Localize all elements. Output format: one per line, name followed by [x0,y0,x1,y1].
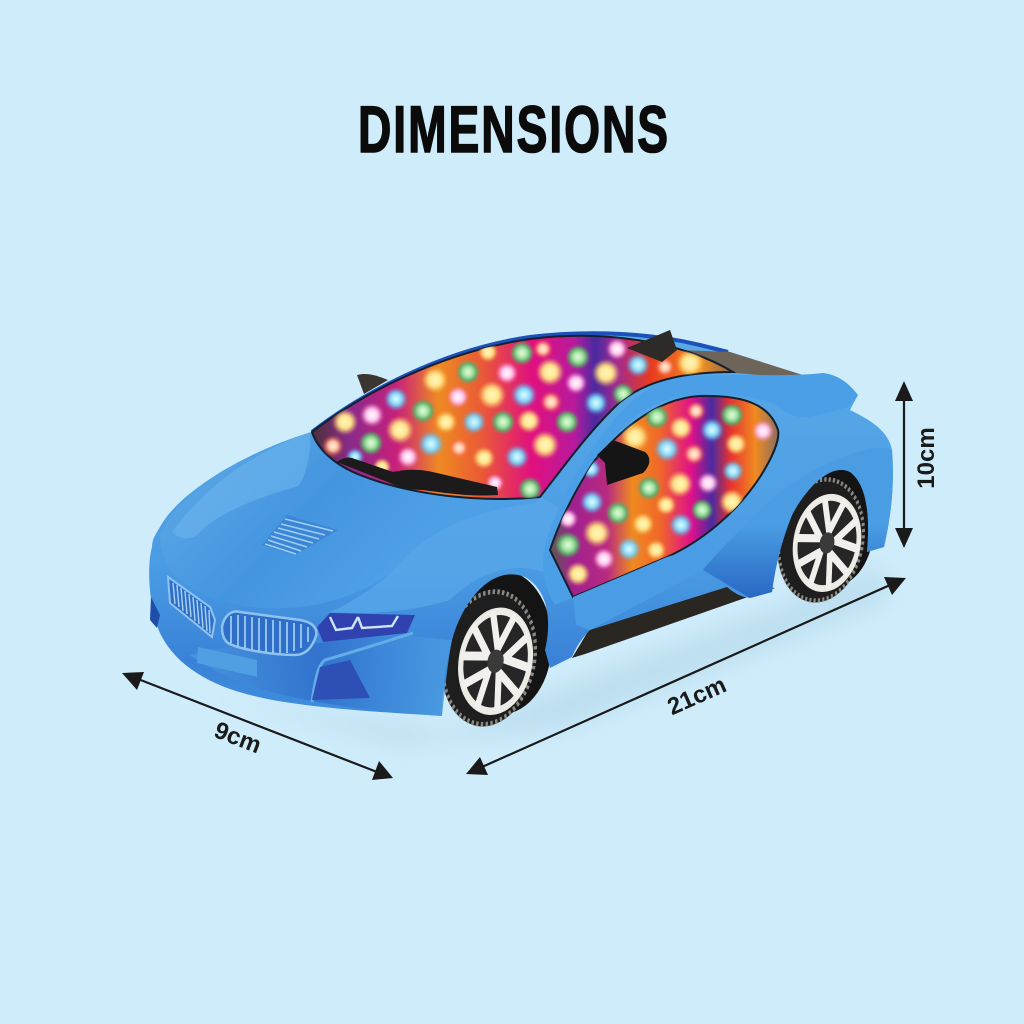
side window lights [555,401,774,586]
hood [160,432,535,608]
windshield [312,336,733,501]
wiper [337,458,498,496]
title: DIMENSIONS [358,93,668,167]
rear wheel [768,470,874,610]
hood scoop [262,515,338,555]
hood light panel [172,432,310,538]
left grille [168,577,215,637]
dimension: height [895,381,940,548]
headlight [317,613,415,642]
number plate [197,647,257,677]
car body [149,333,893,716]
toy car [149,330,893,734]
dimension: height: 10cm [913,427,940,489]
dimension: length [466,577,906,775]
front wheel [431,582,547,734]
side mirror [597,440,649,485]
side intake [150,597,160,628]
roof rear panel [680,350,806,379]
side window [550,396,778,597]
windshield lights [322,338,704,501]
rear fin [357,374,388,394]
lower intake [312,633,413,702]
rear fender [703,448,893,598]
front fender [330,497,571,613]
wheel arches [452,463,874,714]
side spoiler [543,373,858,605]
roof rail [312,333,728,432]
door sill [573,530,720,630]
car shadow [230,565,890,745]
dimension: length: 21cm [663,671,730,721]
dimension: width: 9cm [210,717,265,759]
front bumper [190,636,452,716]
underbody [572,582,775,658]
right grille [222,612,316,655]
roof fin [627,330,677,362]
dimension: width [122,672,393,780]
